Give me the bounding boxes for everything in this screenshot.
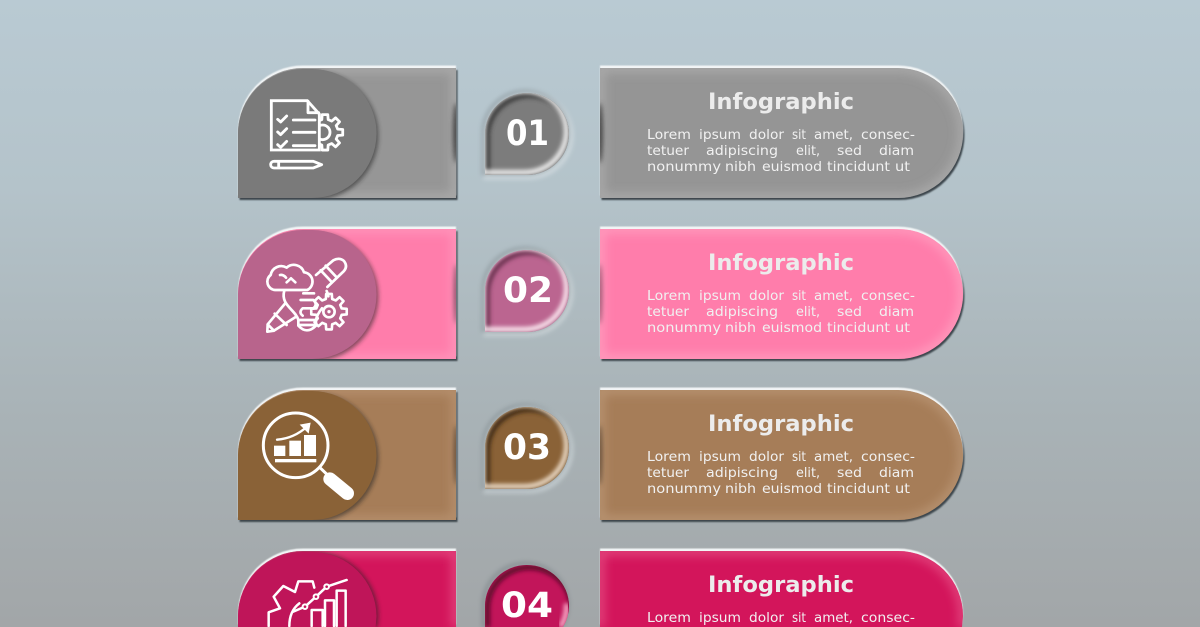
body text: consec- [861, 611, 915, 626]
heading: Infographic [708, 250, 854, 276]
panel: left icon card 4 [238, 548, 456, 627]
body text: sit [792, 128, 806, 143]
body text: amet, [814, 450, 853, 465]
body text: ut [895, 482, 910, 497]
body text: euismod [762, 321, 822, 336]
body text: nibh [725, 160, 756, 175]
body text: dolor [749, 450, 785, 465]
body text: elit, [796, 305, 820, 320]
body text: amet, [814, 611, 853, 626]
body text: diam [879, 305, 914, 320]
heading: Infographic [708, 411, 854, 437]
heading: Infographic [708, 572, 854, 598]
body text: Lorem [647, 450, 691, 465]
body text: sit [792, 289, 806, 304]
body text: adipiscing [706, 466, 778, 481]
panel: left icon card 2 [238, 226, 458, 361]
body text: tincidunt [827, 160, 890, 175]
panel: right text card 1 [597, 66, 964, 200]
body text: sit [792, 611, 806, 626]
number badge 04 [484, 564, 572, 627]
body text: sed [837, 144, 862, 159]
body text: dolor [749, 611, 785, 626]
body text: nibh [725, 321, 756, 336]
body text: sit [792, 450, 806, 465]
number 03: 03 [503, 428, 551, 468]
body text: ipsum [699, 611, 741, 626]
heading: Infographic [708, 89, 854, 115]
body text [647, 289, 915, 336]
body text: tincidunt [827, 321, 890, 336]
body text: adipiscing [706, 144, 778, 159]
body text: consec- [861, 450, 915, 465]
panel: right text card 4 [600, 548, 963, 627]
body text: ipsum [699, 128, 741, 143]
body text: consec- [861, 128, 915, 143]
body text [647, 128, 915, 175]
icon: gear with rising bars [269, 580, 347, 626]
row 4 [238, 548, 963, 627]
number badge 01 [482, 90, 572, 178]
body text: elit, [796, 466, 820, 481]
body text: euismod [762, 482, 822, 497]
body text: sed [837, 466, 862, 481]
body text: tetuer [647, 305, 690, 320]
body text: ut [895, 160, 910, 175]
body text: amet, [814, 289, 853, 304]
body text: amet, [814, 128, 853, 143]
body text [647, 450, 915, 497]
body text: euismod [762, 160, 822, 175]
panel: right text card 2 [598, 226, 964, 361]
panel: right text card 3 [598, 388, 964, 522]
row 1 [238, 66, 964, 200]
body text: consec- [861, 289, 915, 304]
icon: magnifier over bar chart [263, 413, 347, 493]
body text: tetuer [647, 144, 690, 159]
number 04: 04 [501, 586, 553, 626]
number 02: 02 [503, 271, 553, 311]
body text: nonummy [647, 160, 721, 175]
body text: elit, [796, 144, 820, 159]
body text: Lorem [647, 128, 691, 143]
row 3 [238, 388, 964, 522]
row 2 [238, 226, 964, 361]
body text: dolor [749, 128, 785, 143]
icon: document checklist with gear [271, 101, 343, 168]
body text: ipsum [699, 289, 741, 304]
body text: Lorem [647, 289, 691, 304]
number 01: 01 [506, 114, 549, 154]
number badge 02 [482, 248, 572, 334]
body text: tetuer [647, 466, 690, 481]
panel: left icon card 1 [238, 66, 459, 200]
body text: tincidunt [827, 482, 890, 497]
panel: left icon card 3 [238, 388, 458, 522]
icon: lightbulb, brain cloud, pencil, gear [267, 259, 347, 332]
body text: sed [837, 305, 862, 320]
body text: diam [879, 144, 914, 159]
body text: dolor [749, 289, 785, 304]
body text: diam [879, 466, 914, 481]
body text: ut [895, 321, 910, 336]
body text: Lorem [647, 611, 691, 626]
body text: nonummy [647, 482, 721, 497]
body text: adipiscing [706, 305, 778, 320]
body text: ipsum [699, 450, 741, 465]
body text: nibh [725, 482, 756, 497]
number badge 03 [482, 404, 572, 492]
body text: nonummy [647, 321, 721, 336]
